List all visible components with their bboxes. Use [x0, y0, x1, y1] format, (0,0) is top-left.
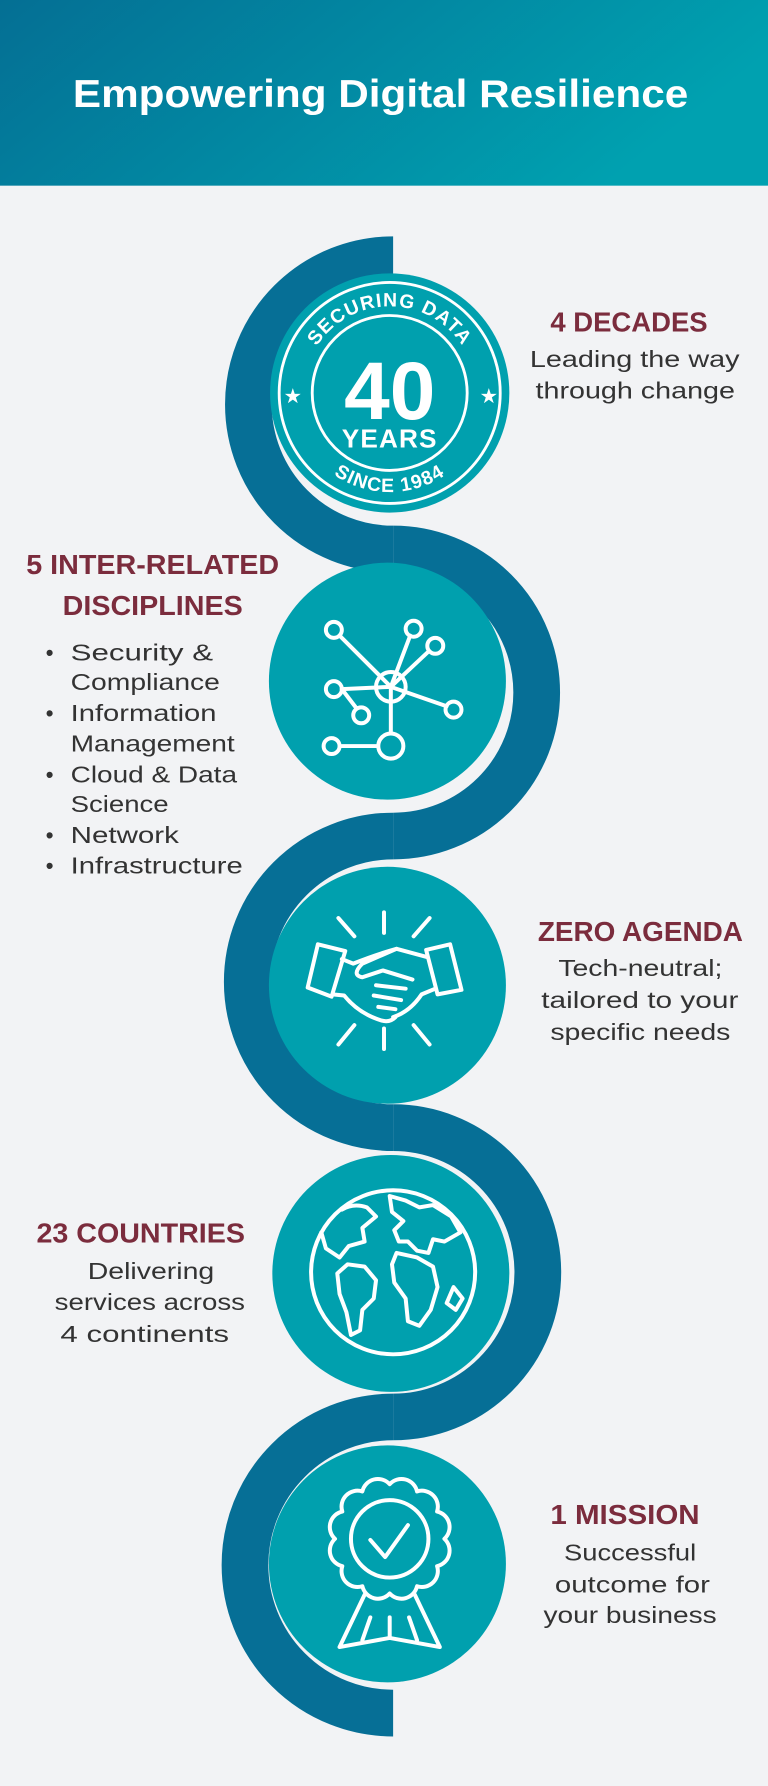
text: zero agenda: Tech-neutral;: [558, 955, 722, 981]
badge: 40 years: ★: [284, 385, 302, 408]
text: disciplines: DISCIPLINES: [63, 590, 243, 621]
circle: award icon: [269, 1445, 506, 1682]
text: disciplines: Information: [71, 700, 216, 726]
text: 23 countries: 4 continents: [60, 1321, 229, 1347]
text: 1 mission: your business: [544, 1602, 717, 1628]
text: disciplines: Network: [71, 822, 180, 848]
text: disciplines: •: [46, 640, 54, 666]
text: disciplines: Compliance: [71, 669, 220, 695]
badge: 40 years: [270, 273, 510, 513]
text: disciplines: •: [46, 853, 54, 879]
text: disciplines: [26, 549, 279, 879]
spiral band: [245, 260, 538, 1713]
text: 4 decades: Leading the way: [530, 346, 740, 372]
text: 23 countries: services across: [55, 1289, 245, 1315]
title: Empowering Digital Resilience: [73, 73, 688, 116]
header banner: [0, 0, 768, 186]
text: 1 mission: 1 MISSION: [550, 1499, 700, 1530]
badge: 40 years: ★: [480, 385, 498, 408]
text: disciplines: Management: [71, 731, 236, 757]
text: disciplines: Infrastructure: [71, 853, 243, 879]
text: 23 countries: Delivering: [88, 1258, 214, 1284]
text: 4 decades: [530, 306, 740, 404]
circle: globe icon: [272, 1155, 509, 1392]
text: disciplines: Security &: [71, 640, 213, 666]
badge: 40 years: SECURING DATA: [308, 293, 470, 345]
text: zero agenda: [538, 916, 743, 1045]
text: disciplines: Science: [71, 791, 169, 817]
badge: 40 years: SINCE 1984: [336, 465, 444, 492]
text: zero agenda: specific needs: [550, 1019, 730, 1045]
text: 23 countries: 23 COUNTRIES: [36, 1218, 245, 1249]
text: disciplines: •: [46, 822, 54, 848]
text: 1 mission: outcome for: [555, 1571, 710, 1597]
text: 4 decades: through change: [536, 378, 735, 404]
text: disciplines: 5 INTER-RELATED: [26, 549, 279, 580]
text: 1 mission: [544, 1499, 717, 1628]
text: 23 countries: [36, 1218, 245, 1347]
badge: 40 years: 40: [344, 346, 435, 437]
badge: 40 years: YEARS: [342, 424, 438, 454]
text: zero agenda: ZERO AGENDA: [538, 916, 743, 947]
text: 1 mission: Successful: [564, 1539, 696, 1565]
circle: handshake icon: [269, 867, 506, 1104]
text: zero agenda: tailored to your: [541, 987, 739, 1013]
circle: network icon: [269, 563, 506, 800]
text: disciplines: •: [46, 762, 54, 788]
text: 4 decades: 4 DECADES: [550, 306, 708, 337]
text: disciplines: •: [46, 700, 54, 726]
text: disciplines: Cloud & Data: [71, 762, 237, 788]
